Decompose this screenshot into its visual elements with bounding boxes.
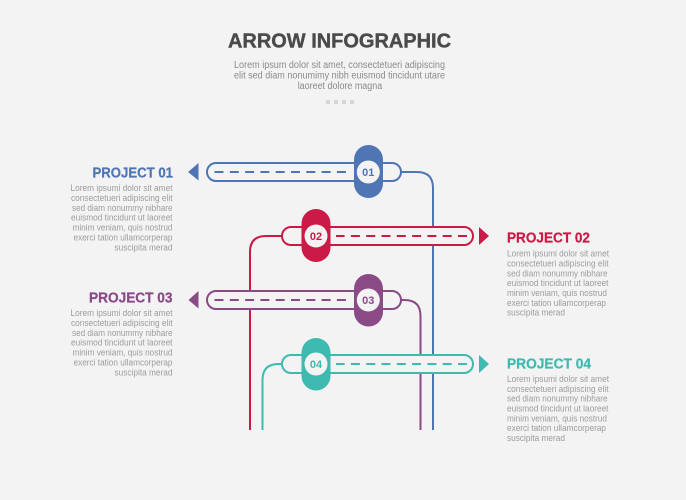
text block: project 03 [70,290,173,377]
heading: project 04: PROJECT 04 [507,356,591,372]
body: project 03: suscipita merad [114,367,173,377]
pill badge 02 [302,209,330,262]
body: project 03: minim veniam, quis nostrud [72,348,173,358]
body: project 02: euismod tincidunt ut laoreet [507,278,609,288]
pill badge 03 [354,274,383,326]
body: project 01: euismod tincidunt ut laoreet [71,213,173,223]
arrow bar: project 03: 03 [362,295,374,307]
body: project 01: consectetueri adipiscing elit [71,193,173,203]
body: project 03: consectetueri adipiscing elit [71,318,173,328]
connector line: project 01 [400,172,433,430]
text block: project 01 [70,166,173,252]
arrow bar: project 02 [282,209,489,262]
body: project 03: exerci tation ullamcorperap [74,357,173,367]
body: project 01: minim veniam, quis nostrud [72,223,173,233]
body: project 02: Lorem ipsumi dolor sit amet [507,249,610,259]
connector line: project 02 [250,236,282,430]
body: project 03 [70,308,173,377]
arrow bar: project 01 [188,145,401,198]
subtitle: laoreet dolore magna [298,81,383,92]
pill badge 01 [354,145,383,198]
body: project 03: Lorem ipsumi dolor sit amet [70,308,173,318]
body: project 04: sed diam nonummy nibhare [507,394,608,404]
arrowhead [479,355,489,373]
subtitle: Lorem ipsum dolor sit amet, consectetueri adipiscing [234,60,445,71]
body: project 04: Lorem ipsumi dolor sit amet [507,374,610,384]
subtitle [234,60,445,92]
body: project 02: suscipita merad [507,308,565,318]
arrowhead [188,291,198,308]
title dots [326,100,354,104]
body: project 02: exerci tation ullamcorperap [507,298,606,308]
body: project 04: suscipita merad [507,433,565,443]
text block: project 04 [507,356,610,443]
subtitle: elit sed diam nonumimy nibh euismod tincidunt utare [234,71,445,82]
body: project 02: sed diam nonummy nibhare [507,268,608,278]
pill badge 04 [302,338,330,390]
body: project 01: exerci tation ullamcorperap [74,232,173,242]
title: ARROW INFOGRAPHIC [228,30,451,52]
body: project 04 [507,374,610,443]
body: project 02: minim veniam, quis nostrud [507,288,607,298]
body: project 02: consectetueri adipiscing elit [507,258,609,268]
arrowhead [188,163,198,180]
arrow bar: project 04: 04 [310,359,323,371]
body: project 01: sed diam nonummy nibhare [72,203,173,213]
body: project 04: euismod tincidunt ut laoreet [507,404,609,414]
arrow bar: project 04 [282,338,489,390]
body: project 04: exerci tation ullamcorperap [507,423,606,433]
arrowhead [479,227,489,245]
text block: project 02 [507,231,610,318]
connector line: project 03 [400,300,420,430]
body: project 03: euismod tincidunt ut laoreet [71,338,173,348]
arrow bar: project 01: 01 [362,167,374,179]
body: project 04: consectetueri adipiscing elit [507,384,609,394]
body: project 03: sed diam nonummy nibhare [72,328,173,338]
arrow bar: project 03 [188,274,401,326]
heading: project 01: PROJECT 01 [92,166,173,182]
body: project 02 [507,249,610,318]
arrow bar: project 02: 02 [310,231,322,243]
heading: project 02: PROJECT 02 [507,231,590,247]
heading: project 03: PROJECT 03 [89,290,172,306]
body: project 01: suscipita merad [114,242,173,252]
body: project 01: Lorem ipsumi dolor sit amet [70,183,173,193]
body: project 04: minim veniam, quis nostrud [507,413,607,423]
connector line: project 04 [262,364,282,430]
body: project 01 [70,183,173,252]
